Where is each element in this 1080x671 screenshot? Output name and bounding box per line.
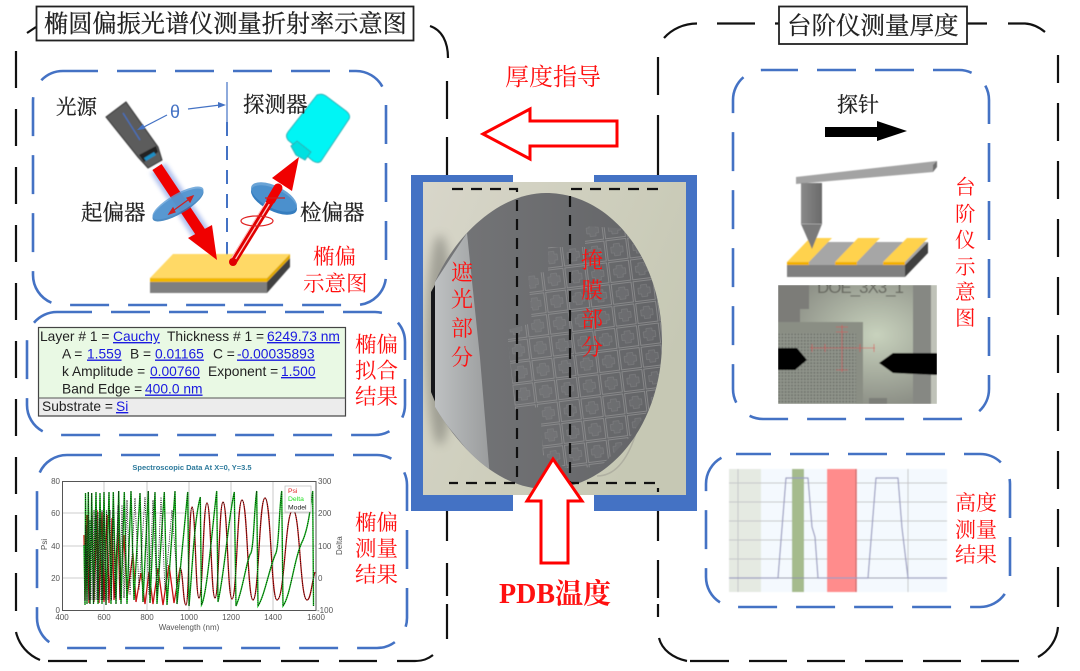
axis labels: 0 — [56, 606, 61, 615]
legend: Psi — [288, 488, 298, 495]
axis labels: 0 — [318, 574, 323, 583]
label: fit result: 椭偏 — [355, 333, 398, 357]
axis labels: 80 — [51, 477, 61, 486]
label: masked part: 掩 — [581, 248, 603, 273]
table: fit parameters: 0.01165 — [155, 346, 204, 362]
axis labels: 40 — [51, 542, 61, 551]
panel: ellipsometry schematic — [33, 71, 386, 305]
label: profilometer schematic: 台 — [955, 176, 976, 199]
axis labels: Wavelength (nm) — [159, 623, 220, 632]
axis labels: 1400 — [264, 613, 282, 622]
axis labels: Delta — [335, 536, 344, 555]
table: fit parameters: Exponent = — [208, 364, 282, 379]
legend: Model — [288, 504, 307, 512]
table: fit parameters: 1.559 — [87, 346, 122, 362]
label: masked part: 分 — [581, 335, 603, 360]
arrow: reflected beam — [229, 157, 299, 266]
axis labels: -100 — [317, 606, 334, 615]
label: shaded part: 部 — [451, 316, 473, 341]
table: fit parameters: k Amplitude = — [62, 364, 145, 379]
label: thickness guidance: 厚度指导 — [505, 64, 601, 91]
table: fit parameters: 1.500 — [281, 364, 316, 379]
panel: fitting result — [27, 312, 405, 435]
heading: profilometer title — [779, 6, 967, 44]
label: measurement result: 测量 — [355, 537, 398, 561]
label: analyzer: 检偏器 — [300, 201, 365, 225]
chart: height profile — [729, 469, 947, 592]
series: delta — [84, 491, 314, 606]
dashed bracket: shaded part — [449, 189, 517, 483]
chart title: Spectroscopic Data At X=0, Y=3.5 — [132, 463, 252, 472]
label: masked part: 膜 — [581, 278, 603, 303]
label: profilometer schematic: 意 — [955, 281, 976, 304]
table: fit parameters: Band Edge = — [62, 382, 142, 396]
axis labels: 200 — [318, 509, 332, 518]
series: psi — [84, 498, 315, 605]
axis labels: 1000 — [180, 613, 198, 622]
axis labels: 800 — [140, 613, 154, 622]
label: masked part: 部 — [581, 307, 603, 332]
divider: normal line — [226, 82, 228, 255]
label: probe: 探针 — [837, 93, 879, 117]
label: shaded part: 分 — [451, 345, 473, 370]
heading: ellipsometer title: 椭圆偏振光谱仪测量折射率示意图 — [44, 11, 407, 38]
axis labels: Psi — [40, 539, 49, 550]
table: fit parameters: -0.00035893 — [237, 346, 315, 362]
label: measurement result: 结果 — [355, 563, 398, 587]
table: fit parameters: Layer # 1 = — [40, 329, 109, 344]
photo: microscope view — [778, 278, 937, 404]
icon: theta angle — [137, 102, 226, 130]
heading: profilometer title: 台阶仪测量厚度 — [787, 12, 958, 40]
axis labels: 1200 — [222, 613, 240, 622]
arrow: PDB temperature — [527, 459, 582, 563]
label: ellipsometry schematic: 示意图 — [303, 272, 368, 296]
label: polarizer: 起偏器 — [81, 201, 146, 225]
table: fit parameters: 6249.73 nm — [267, 329, 340, 344]
label: detector: 探测器 — [243, 93, 308, 117]
photo frame: blue bracket — [411, 175, 697, 511]
axis labels: 400 — [55, 613, 69, 622]
icon: theta angle: θ — [170, 102, 180, 122]
series: model — [84, 491, 315, 606]
icon: stepped sample — [787, 224, 928, 277]
label: height result: 高度 — [955, 491, 997, 515]
axis labels: 60 — [51, 509, 61, 518]
label: shaded part: 遮 — [451, 260, 474, 285]
panel: ellipsometer outer dashed frame — [16, 26, 448, 661]
icon: analyzer — [247, 176, 301, 221]
label: profilometer schematic: 仪 — [955, 229, 976, 252]
panel: profilometer schematic — [733, 70, 989, 419]
legend: Delta — [288, 496, 304, 503]
label: fit result: 结果 — [355, 385, 398, 409]
table: fit parameters: Substrate = — [42, 399, 113, 414]
icon: polarization arrow — [169, 196, 193, 214]
label: ellipsometry schematic: 椭偏 — [313, 245, 356, 269]
arrow: incident beam — [157, 167, 217, 260]
label: PDB temperature: PDB温度 — [499, 578, 611, 610]
axis labels: 100 — [318, 542, 332, 551]
table: fit parameters: Cauchy — [113, 329, 160, 344]
label: height result: 测量 — [955, 518, 997, 542]
panel: profilometer outer dashed frame — [658, 24, 1058, 661]
axis labels: 300 — [318, 477, 332, 486]
label: height result: 结果 — [955, 543, 997, 567]
panel: height result — [706, 454, 1010, 607]
icon: stylus — [796, 161, 937, 224]
axis labels — [40, 477, 344, 632]
label: profilometer schematic: 阶 — [955, 203, 976, 226]
axis labels: 1600 — [307, 613, 325, 622]
label: shaded part: 光 — [451, 287, 473, 312]
label: measurement result: 椭偏 — [355, 511, 398, 535]
table: fit parameters: 400.0 nm — [145, 382, 203, 396]
chart: spectroscopic data — [40, 463, 344, 632]
table: fit parameters: A = — [62, 346, 82, 362]
panel: measurement result — [37, 455, 407, 648]
icon: detector — [286, 94, 350, 162]
axis labels: 600 — [97, 613, 111, 622]
photo: microscope view: DOE_3X3_1 — [817, 278, 904, 297]
table: fit parameters: C = — [213, 346, 239, 362]
icon: polarizer — [148, 181, 208, 227]
table: fit parameters: B = — [130, 346, 155, 362]
table: fit parameters: Si — [116, 399, 128, 414]
table: fit parameters — [38, 327, 346, 416]
icon: sample — [150, 254, 290, 293]
dashed bracket: masked part — [570, 189, 658, 492]
icon: light source — [106, 102, 162, 168]
arrow: thickness guidance — [483, 109, 617, 159]
label: profilometer schematic: 图 — [955, 307, 976, 330]
table: fit parameters: 0.00760 — [150, 364, 200, 379]
label: fit result: 拟合 — [355, 359, 398, 383]
photo: wafer — [423, 182, 686, 495]
label: profilometer schematic: 示 — [955, 257, 976, 279]
label: light source: 光源 — [56, 96, 97, 119]
arrow: scan direction — [825, 121, 907, 141]
legend — [285, 486, 311, 512]
table: fit parameters: Thickness # 1 = — [167, 329, 268, 344]
axis labels: 20 — [51, 574, 61, 583]
